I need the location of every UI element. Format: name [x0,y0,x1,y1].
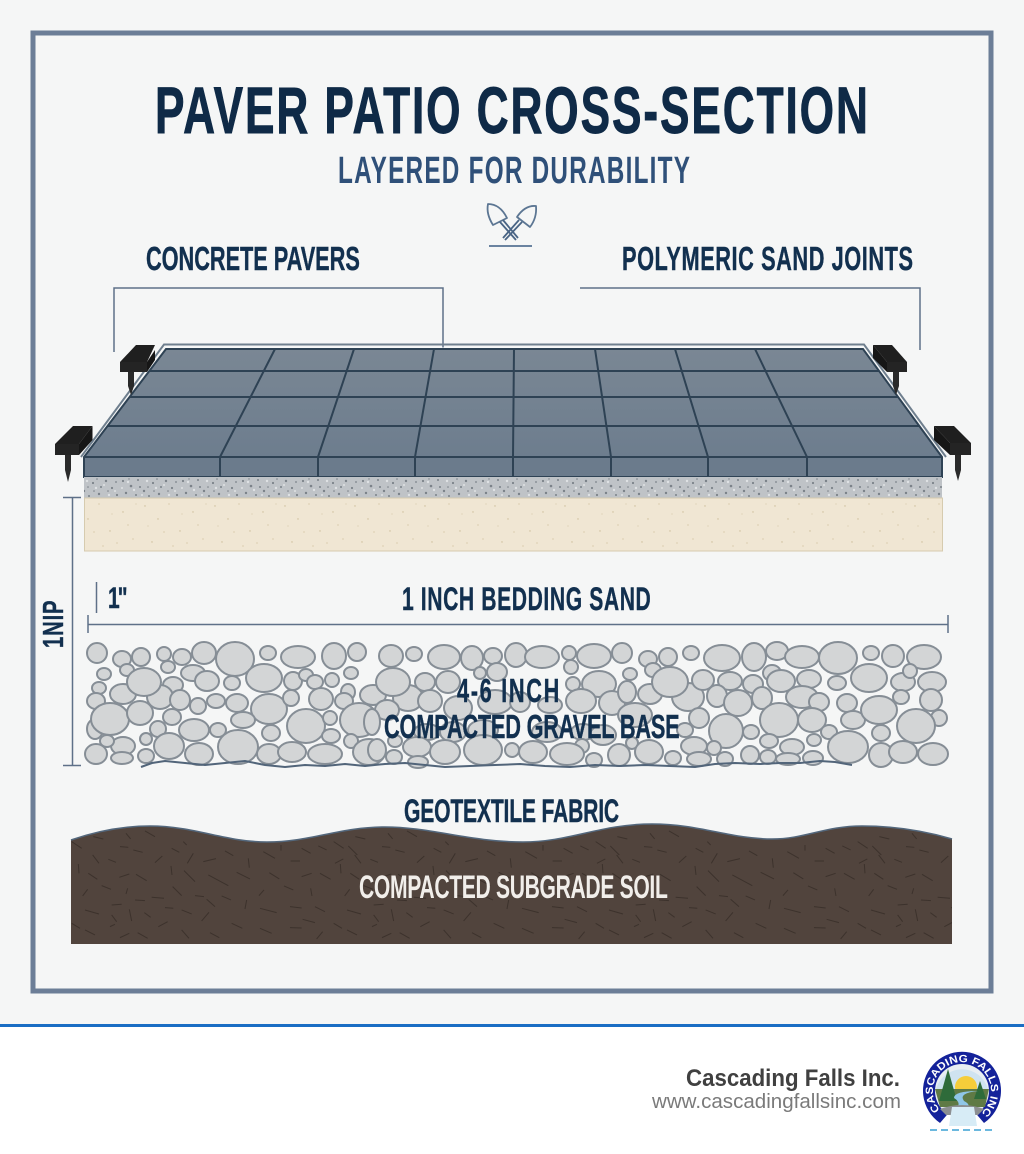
label: one inch: 1" [108,583,128,615]
logo: CASCADING FALLS INC [926,1054,998,1116]
edge restraint: front left [55,426,92,482]
paver surface [81,344,946,477]
title: PAVER PATIO CROSS-SECTION [155,73,868,147]
edge restraint: back right [873,345,907,395]
gravel setting layer [84,477,942,498]
label: gravel base line two: COMPACTED GRAVEL BASE [384,708,680,745]
dimension label: rotated: 1NIP [38,600,70,648]
label: gravel base line one: 4-6 INCH [457,672,559,709]
subtitle: LAYERED FOR DURABILITY [338,148,690,191]
dimension: total depth [63,498,81,766]
callout line: concrete pavers [114,288,443,356]
callout line: polymeric sand joints [580,288,920,350]
label: compacted subgrade soil: COMPACTED SUBGRADE SOIL [359,868,668,905]
dimension: bedding sand width [88,615,948,633]
label: bedding sand: 1 INCH BEDDING SAND [402,580,651,617]
icon: crossed shovels [488,204,536,246]
geotextile line [141,761,852,767]
edge restraint: back left [120,345,155,395]
company website: www.cascadingfallsinc.com [651,1091,901,1113]
label: polymeric sand joints: POLYMERIC SAND JOINTS [622,240,913,277]
dimension tick: one inch [96,582,98,613]
company name: Cascading Falls Inc. [686,1065,900,1092]
edge restraint: front right [934,426,971,481]
label: concrete pavers: CONCRETE PAVERS [146,240,360,277]
gravel base stones [85,642,948,768]
footer band [0,1024,1024,1154]
outer frame [33,33,991,991]
subgrade soil [71,824,1024,944]
bedding sand layer [84,498,942,551]
footer accent line [0,1024,1024,1027]
label: geotextile fabric: GEOTEXTILE FABRIC [404,792,619,829]
